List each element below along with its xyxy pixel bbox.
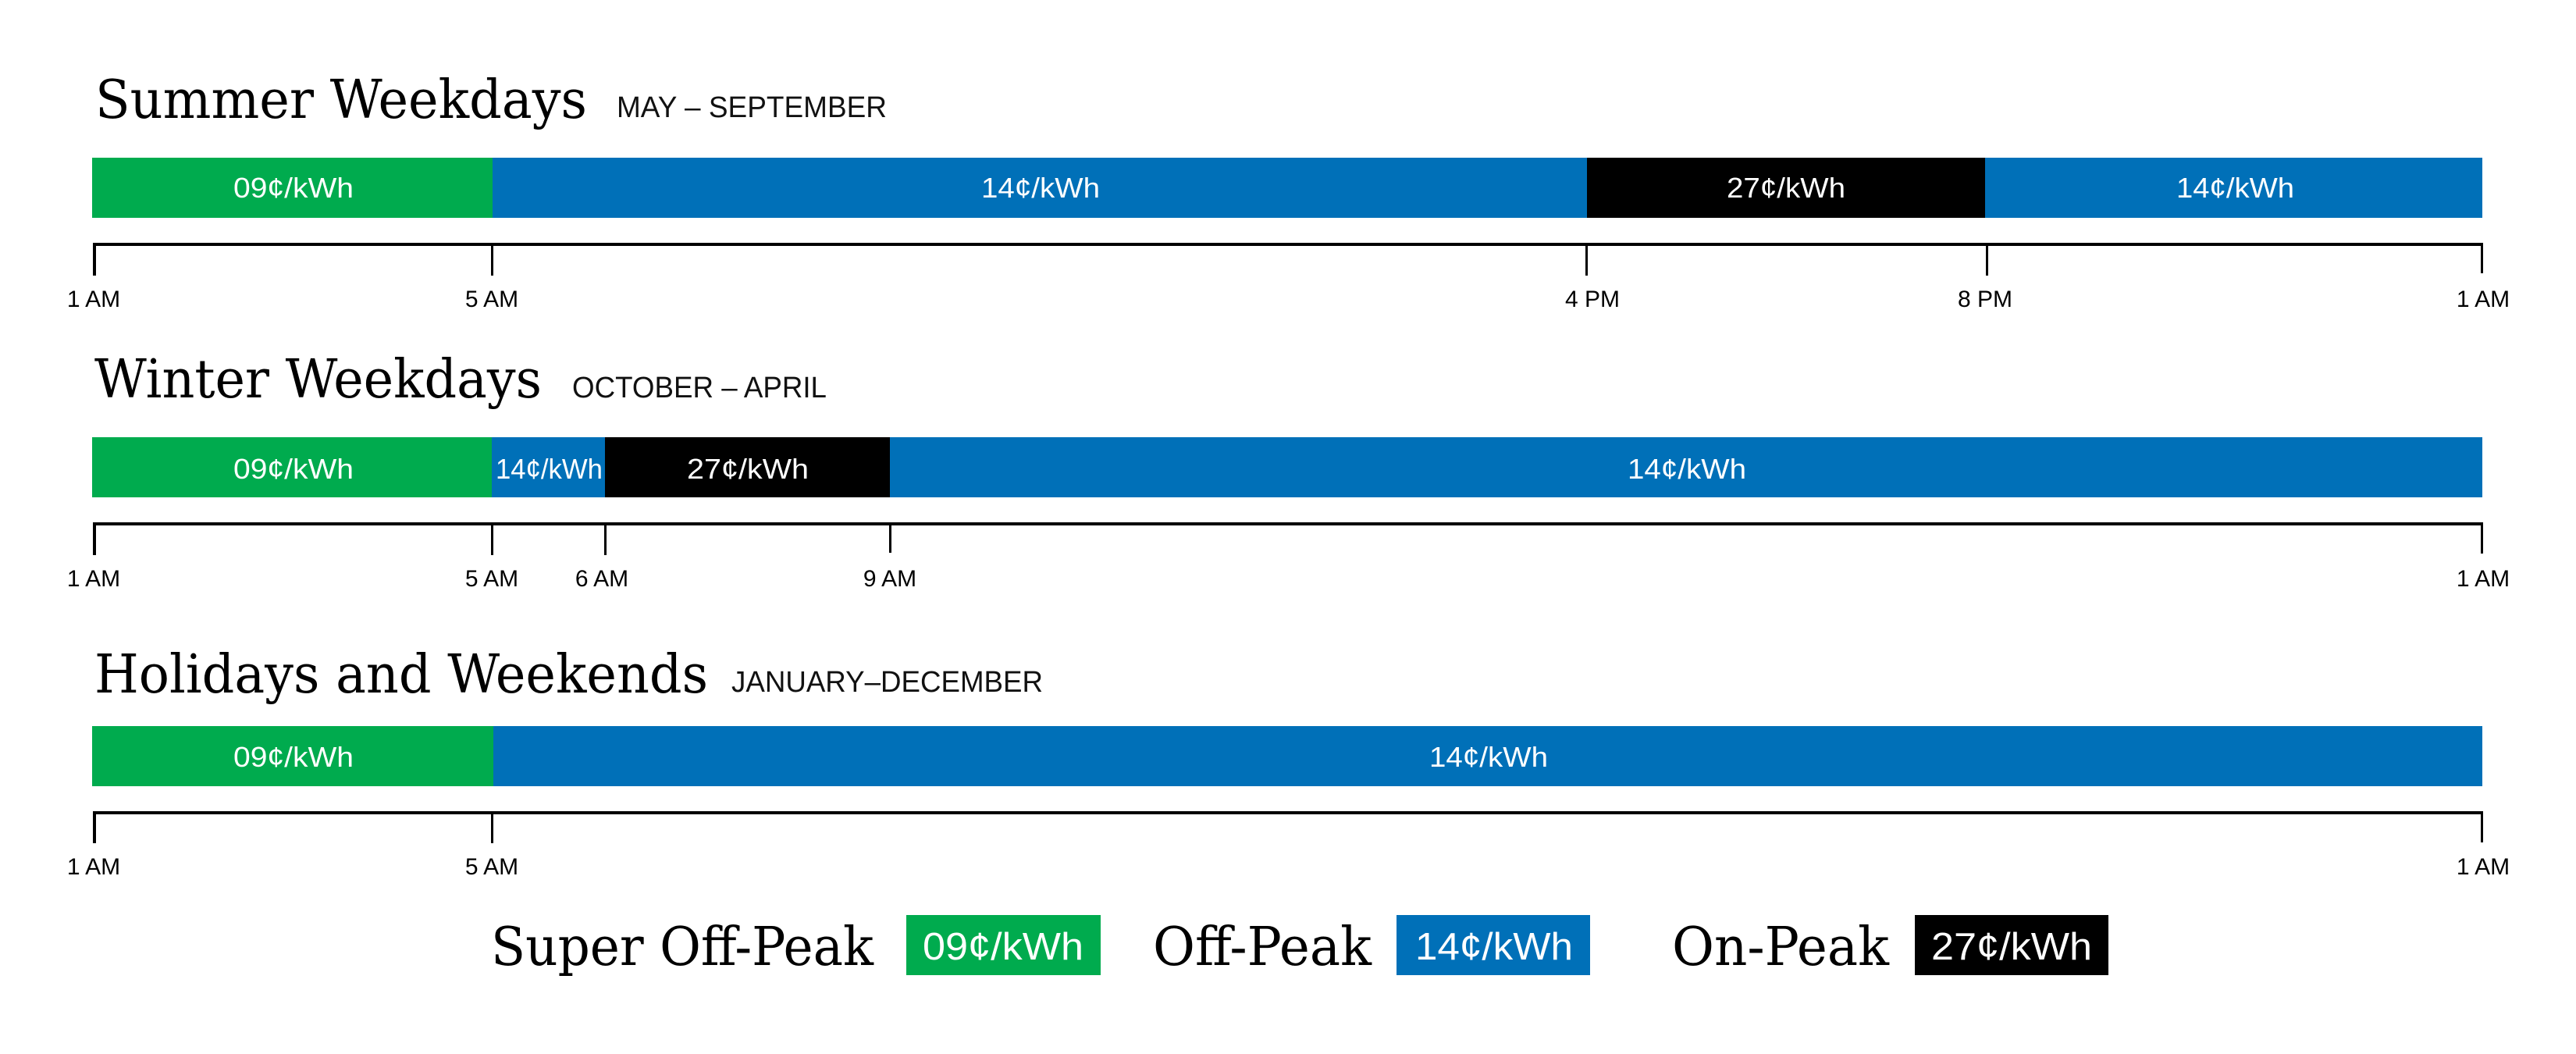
heading: winter weekdays: Winter Weekdays <box>94 349 542 411</box>
rate bar: holidays: 09¢/kWh <box>233 741 354 773</box>
rate bar: winter: 14¢/kWh <box>496 453 603 485</box>
legend item: super off-peak <box>491 915 1101 978</box>
subheading: may to september: MAY – SEPTEMBER <box>617 91 887 124</box>
rate bar: summer <box>92 158 2482 218</box>
time axis: holidays <box>67 811 2510 880</box>
legend item: super off-peak: 09¢/kWh <box>923 926 1083 968</box>
time axis: holidays: 1 AM <box>2457 854 2510 880</box>
panel: summer weekdays <box>67 69 2510 312</box>
time axis: winter: 1 AM <box>2457 566 2510 592</box>
legend item: off-peak <box>1153 915 1590 978</box>
panel: holidays and weekends <box>67 644 2510 880</box>
time axis: summer: 5 AM <box>465 287 518 312</box>
time axis: holidays: 1 AM <box>67 854 120 880</box>
time axis: winter: 1 AM <box>67 566 120 592</box>
time axis: holidays: 5 AM <box>465 854 518 880</box>
legend item: off-peak: Off-Peak <box>1153 917 1372 978</box>
subheading: january to december: JANUARY–DECEMBER <box>731 666 1043 699</box>
time axis: summer: 1 AM <box>2457 287 2510 312</box>
heading: holidays and weekends: Holidays and Weekends <box>94 644 708 706</box>
panel: winter weekdays <box>67 349 2510 592</box>
legend item: on-peak: 27¢/kWh <box>1931 926 2092 968</box>
rate bar: holidays: 14¢/kWh <box>1429 741 1548 773</box>
time axis: summer <box>67 243 2510 312</box>
rate bar: winter: 09¢/kWh <box>233 453 354 485</box>
rate bar: winter <box>92 437 2482 497</box>
heading: summer weekdays: Summer Weekdays <box>95 69 587 131</box>
legend <box>491 915 2108 978</box>
rate bar: winter: 14¢/kWh <box>1628 453 1746 485</box>
legend item: on-peak: On-Peak <box>1672 917 1890 978</box>
rate bar: summer: 09¢/kWh <box>233 172 354 204</box>
rate bar: holidays <box>92 726 2482 786</box>
rate bar: summer: 27¢/kWh <box>1727 172 1845 204</box>
time axis: summer: 4 PM <box>1565 287 1620 312</box>
time axis: winter: 9 AM <box>863 566 916 592</box>
time axis: winter <box>67 522 2510 592</box>
legend item: super off-peak: Super Off-Peak <box>491 917 874 978</box>
rate bar: winter: 27¢/kWh <box>687 453 809 485</box>
time axis: summer: 8 PM <box>1958 287 2012 312</box>
legend item: off-peak: 14¢/kWh <box>1415 926 1573 968</box>
time axis: summer: 1 AM <box>67 287 120 312</box>
legend item: on-peak <box>1672 915 2108 978</box>
subheading: october to april: OCTOBER – APRIL <box>572 372 827 404</box>
rate bar: summer: 14¢/kWh <box>981 172 1100 204</box>
time axis: winter: 5 AM <box>465 566 518 592</box>
time axis: winter: 6 AM <box>575 566 628 592</box>
rate bar: summer: 14¢/kWh <box>2176 172 2294 204</box>
